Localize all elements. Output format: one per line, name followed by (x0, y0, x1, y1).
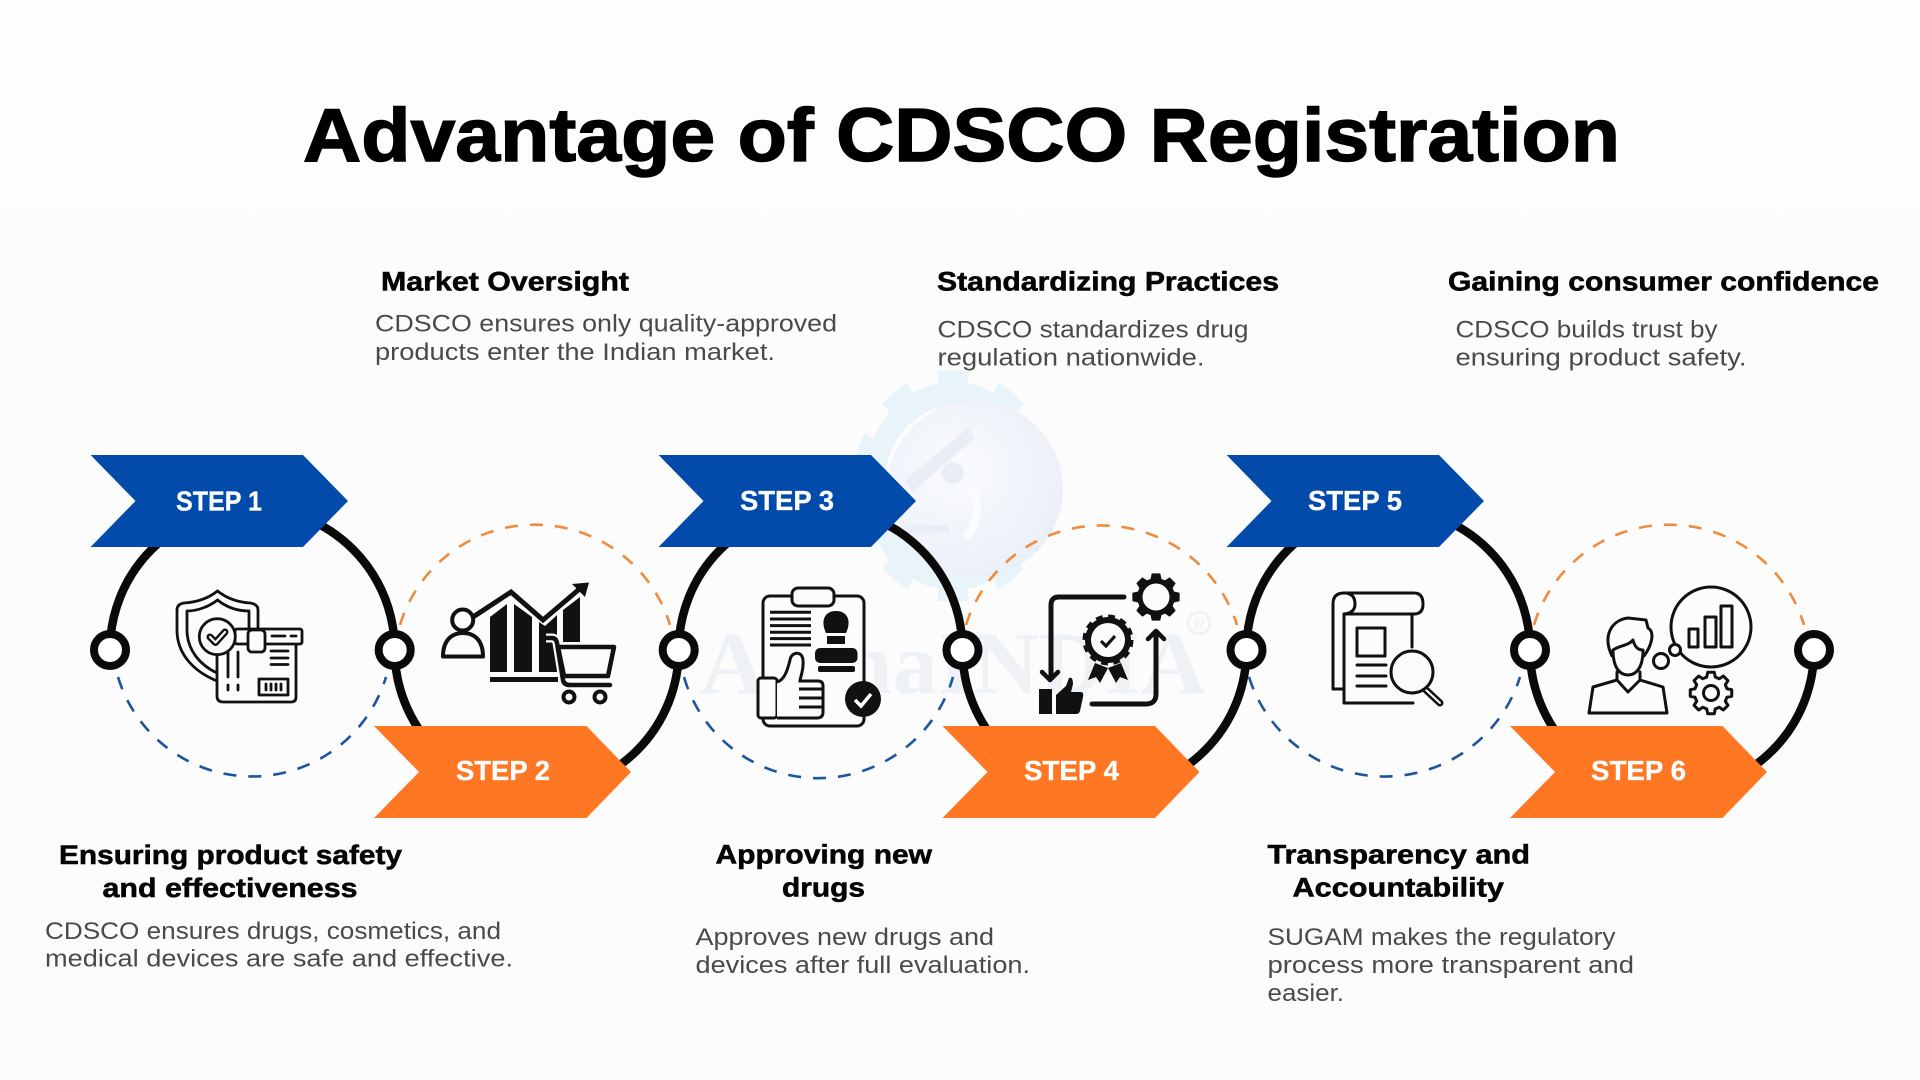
ribbon: step 6: STEP 6 (1591, 755, 1686, 786)
text block: Transparency and Accountability: easier. (1268, 980, 1344, 1007)
text block: Approving new drugs: Approving new (716, 840, 933, 870)
text block: Standardizing Practices (937, 266, 1279, 372)
ribbon: step 5: STEP 5 (1308, 485, 1402, 516)
text block: Transparency and Accountability: Accountability (1292, 872, 1504, 902)
icon: document review (1333, 593, 1440, 703)
ribbon: step 1: STEP 1 (176, 486, 262, 516)
watermark: AlphaINDIA logo: AlphaINDIA (700, 616, 1206, 713)
ribbon: step 1 (91, 455, 348, 547)
text block: Approving new drugs (696, 840, 1030, 979)
text block: Market Oversight: CDSCO ensures only quality-approved (375, 310, 837, 338)
text block: Ensuring product safety and effectiveness: CDSCO ensures drugs, cosmetics, and (45, 918, 501, 945)
icon: certified process (1039, 574, 1179, 714)
text block: Ensuring product safety and effectiveness: Ensuring product safety (59, 840, 402, 870)
watermark: AlphaINDIA logo (700, 371, 1210, 713)
text block: Standardizing Practices: regulation nationwide. (938, 344, 1204, 372)
text block: Approving new drugs: devices after full evaluation. (696, 952, 1030, 979)
text block: Gaining consumer confidence: Gaining consumer confidence (1448, 266, 1879, 296)
text block: Transparency and Accountability: Transparency and (1268, 840, 1530, 870)
text block: Market Oversight: products enter the Indian market. (375, 339, 775, 366)
ribbon: step 6 (1510, 726, 1767, 818)
ribbon: step 4 (942, 726, 1200, 818)
watermark: AlphaINDIA logo: R (1194, 616, 1205, 633)
dashed circles (118, 525, 1804, 778)
text block: Standardizing Practices: CDSCO standardizes drug (938, 316, 1248, 344)
ribbon: step 2 (374, 726, 631, 818)
title: Advantage of CDSCO Registration (303, 93, 1620, 177)
text block: Gaining consumer confidence: ensuring product safety. (1456, 344, 1746, 372)
text block: Gaining consumer confidence (1448, 266, 1879, 372)
ribbon: step 4: STEP 4 (1024, 755, 1119, 786)
ribbon: step 2: STEP 2 (456, 755, 550, 786)
ribbon: step 3: STEP 3 (740, 485, 834, 516)
text block: Ensuring product safety and effectiveness (45, 840, 513, 972)
ribbon: step 3 (659, 455, 916, 547)
text block: Transparency and Accountability: SUGAM makes the regulatory (1268, 924, 1616, 951)
text block: Market Oversight (375, 266, 837, 366)
text block: Approving new drugs: Approves new drugs and (696, 924, 994, 951)
icon: market chart and cart (443, 582, 614, 702)
text block: Market Oversight: Market Oversight (381, 266, 629, 296)
timeline nodes (94, 634, 1830, 666)
black wave path (110, 508, 1814, 792)
text block: Transparency and Accountability (1268, 840, 1634, 1007)
ribbon: step 5 (1227, 455, 1484, 547)
icon: clipboard approval (758, 588, 881, 726)
text block: Ensuring product safety and effectiveness: and effectiveness (102, 873, 358, 903)
text block: Ensuring product safety and effectiveness: medical devices are safe and effective. (45, 946, 513, 972)
icon: analyst with insights (1589, 587, 1751, 714)
text block: Standardizing Practices: Standardizing Practices (937, 266, 1279, 296)
text block: Approving new drugs: drugs (782, 872, 865, 902)
text block: Transparency and Accountability: process more transparent and (1268, 952, 1634, 979)
text block: Gaining consumer confidence: CDSCO builds trust by (1456, 316, 1718, 344)
icon: shield and package (177, 591, 302, 702)
